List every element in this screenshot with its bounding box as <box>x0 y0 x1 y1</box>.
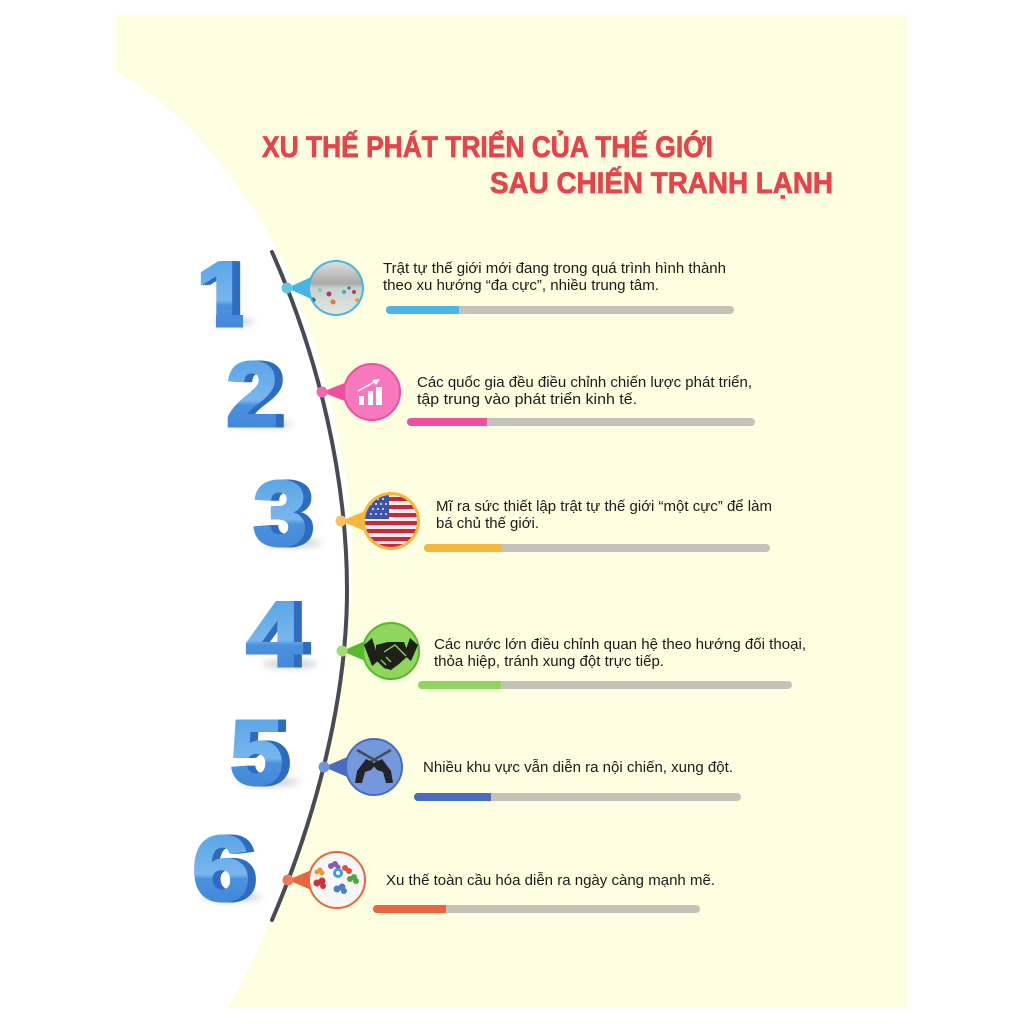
item 2 <box>226 344 755 446</box>
text 6: Xu thế toàn cầu hóa diễn ra ngày càng mạnh mẽ. <box>386 872 715 889</box>
text 3 <box>436 499 772 532</box>
progress bar 2 <box>407 418 755 426</box>
icon: crossed revolvers <box>318 739 402 795</box>
text 4 <box>434 637 806 670</box>
text 4: Các nước lớn điều chỉnh quan hệ theo hướng đối thoại, <box>434 637 806 653</box>
title <box>262 130 833 200</box>
number 2: 2 <box>226 344 278 446</box>
icon: world map with pins <box>282 260 364 316</box>
number 3: 3 <box>253 463 307 565</box>
text 3: bá chủ thế giới. <box>436 516 539 532</box>
item 1 <box>200 260 734 330</box>
number 1 <box>200 261 254 330</box>
text 1: theo xu hướng “đa cực”, nhiều trung tâm. <box>383 278 659 294</box>
progress bar 5 <box>414 793 741 801</box>
icon: people groups around a globe <box>282 852 365 908</box>
title: XU THẾ PHÁT TRIỂN CỦA THẾ GIỚI <box>262 130 713 164</box>
progress bar 4 <box>418 681 792 689</box>
number 5: 5 <box>230 702 283 804</box>
text 5: Nhiều khu vực vẫn diễn ra nội chiến, xung đột. <box>423 759 733 776</box>
text 1 <box>383 261 726 294</box>
number 1: 1 <box>196 244 248 346</box>
text 1: Trật tự thế giới mới đang trong quá trình hình thành <box>383 261 726 277</box>
panel: yellow background with curved white edge <box>116 15 908 1008</box>
icon: handshake <box>336 623 419 679</box>
item 5 <box>230 702 741 804</box>
icon: growth chart <box>316 364 400 420</box>
text 3: Mĩ ra sức thiết lập trật tự thế giới “một cực” để làm <box>436 499 772 515</box>
item 4 <box>246 584 806 689</box>
progress bar 1 <box>386 306 734 314</box>
icon: US flag <box>336 492 420 550</box>
item 6 <box>192 818 715 920</box>
number 6: 6 <box>192 818 250 920</box>
progress bar 6 <box>373 905 700 913</box>
item 3 <box>254 480 771 552</box>
text 4: thỏa hiệp, tránh xung đột trực tiếp. <box>434 654 664 670</box>
timeline curve <box>272 252 347 920</box>
text 2 <box>417 375 752 408</box>
text 2: Các quốc gia đều điều chỉnh chiến lược phát triển, <box>417 375 752 391</box>
text 2: tập trung vào phát triển kinh tế. <box>417 392 637 408</box>
progress bar 3 <box>424 544 770 552</box>
number 4: 4 <box>246 584 302 686</box>
title: SAU CHIẾN TRANH LẠNH <box>490 166 833 200</box>
